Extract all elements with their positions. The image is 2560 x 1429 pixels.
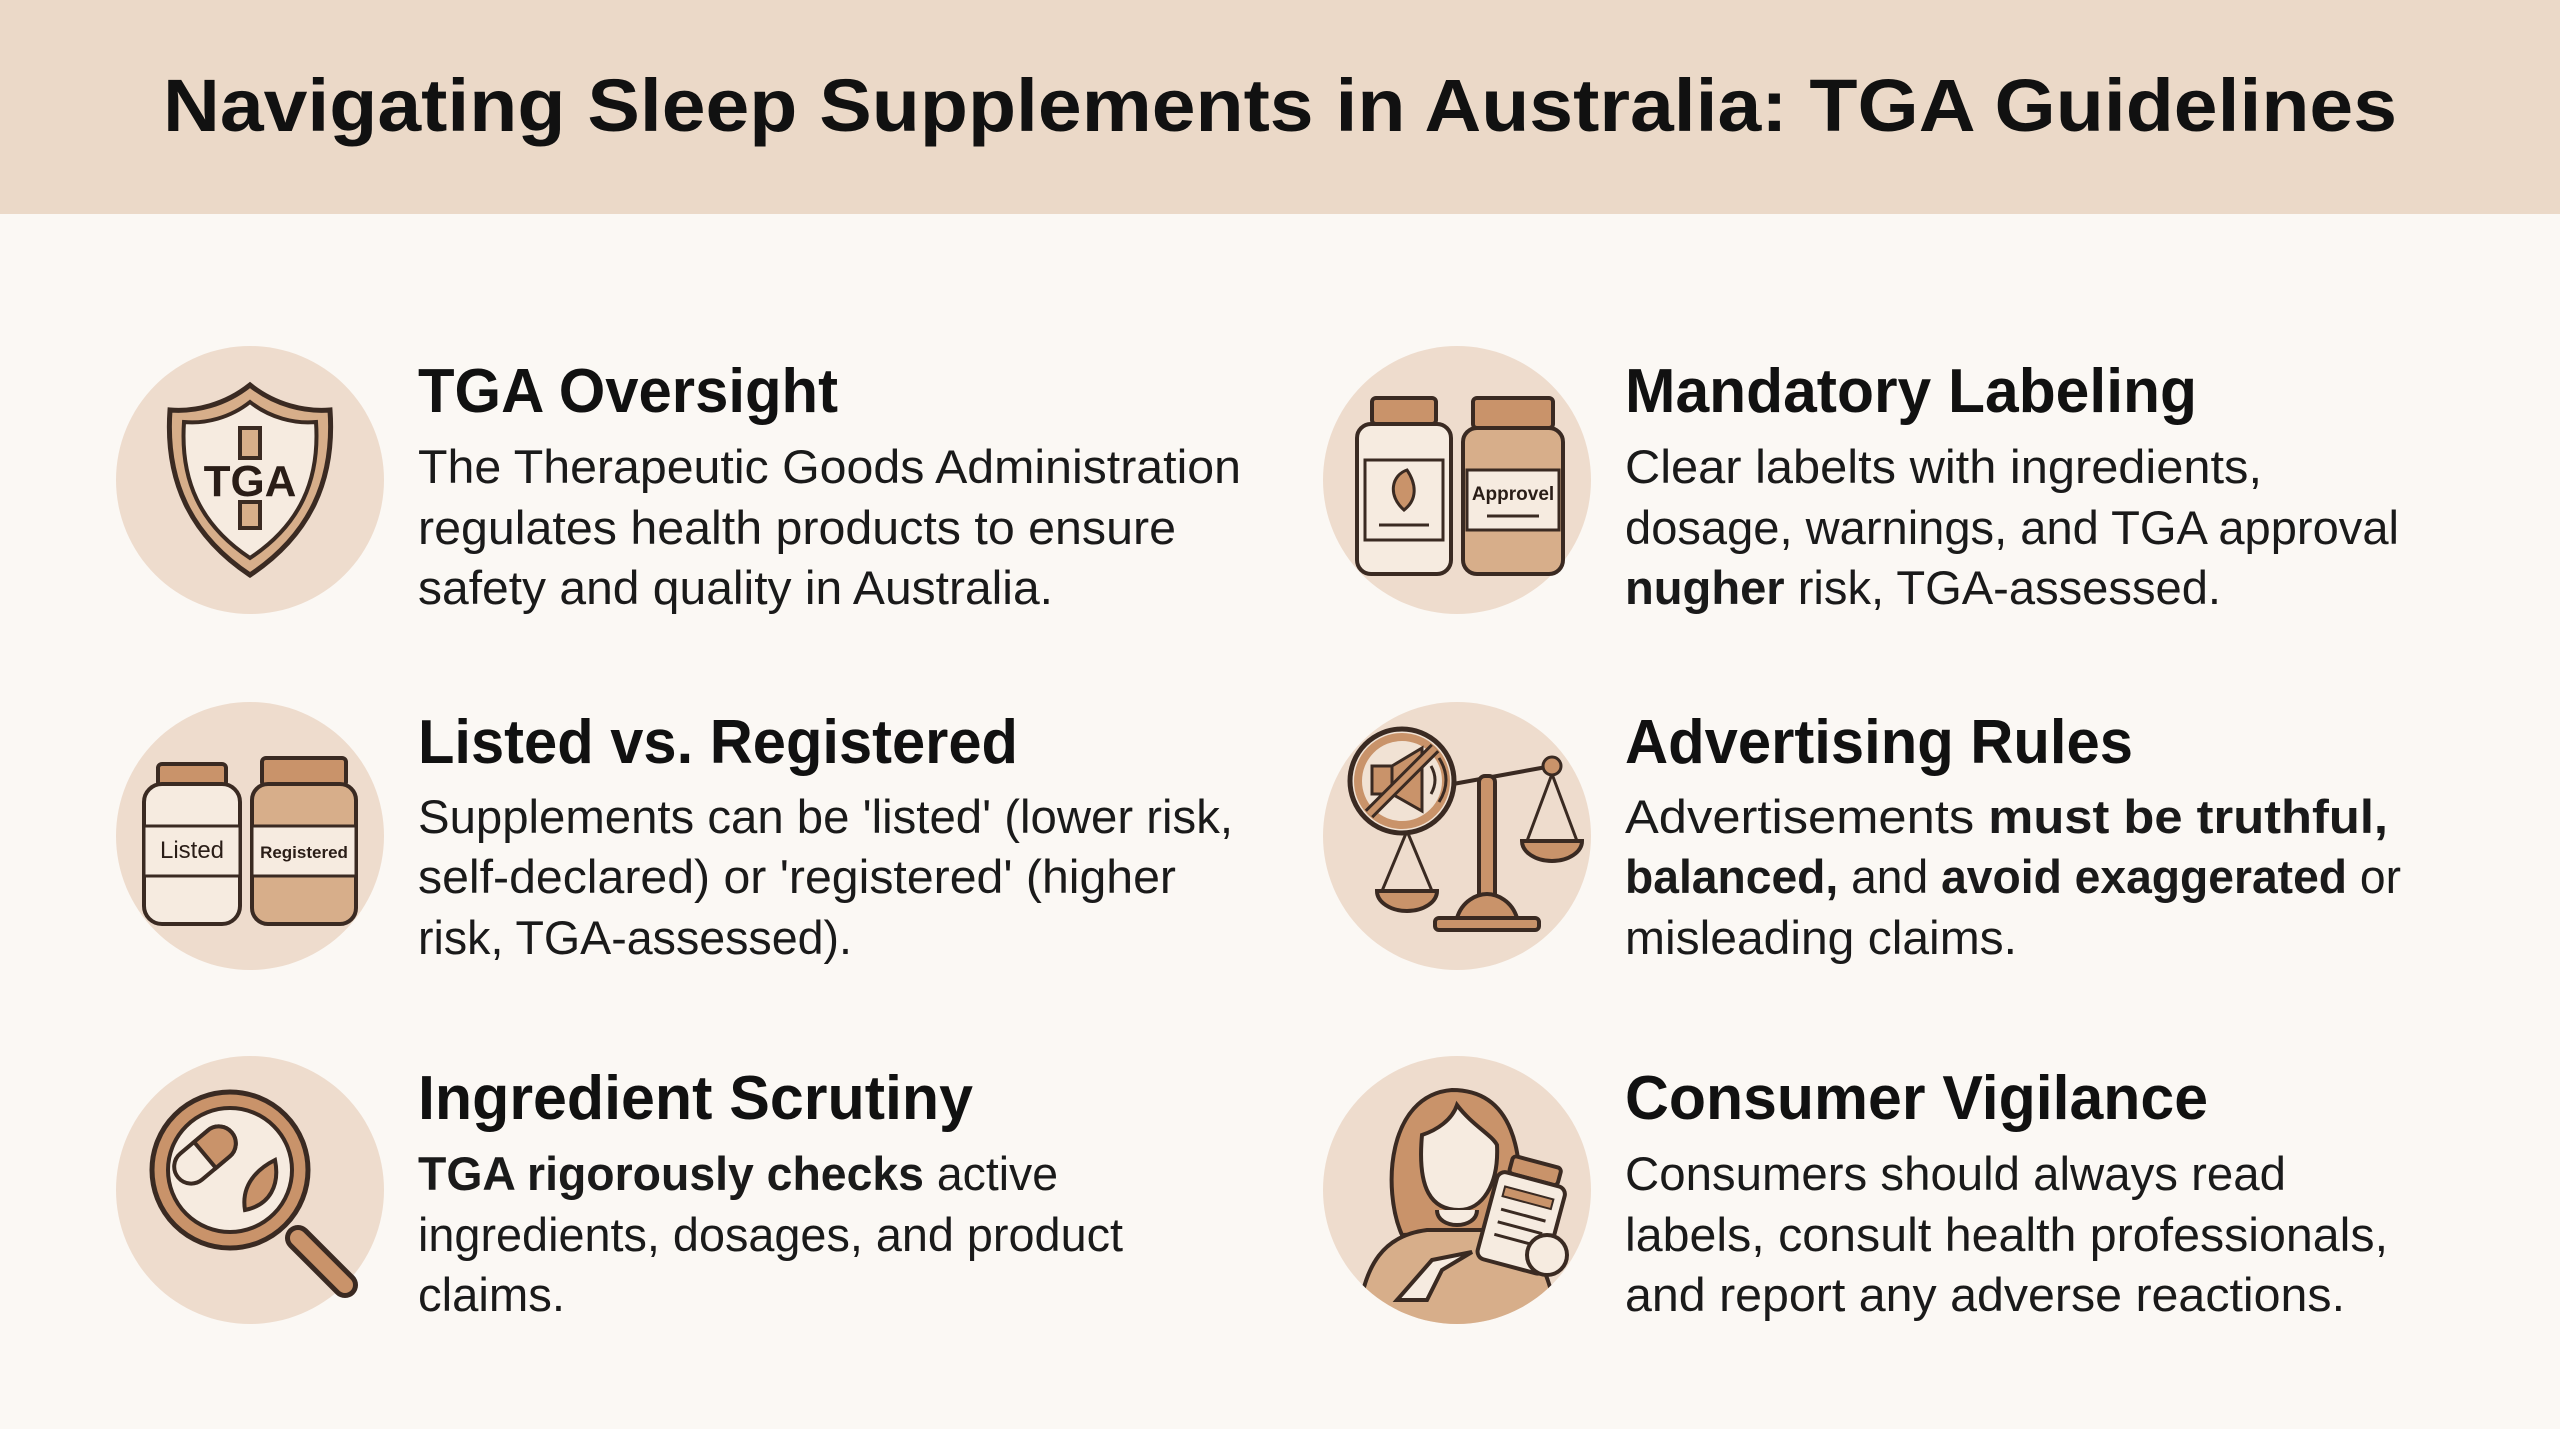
- icon: labelled jars: [1323, 346, 1591, 614]
- heading: Ingredient Scrutiny: [418, 1064, 974, 1133]
- text block: regulates health products to ensure: [418, 501, 1176, 554]
- text block: dosage, warnings, and TGA approval: [1625, 501, 2399, 554]
- text block: The Therapeutic Goods Administration: [418, 440, 1241, 493]
- text block: [1625, 440, 2399, 614]
- heading: TGA Oversight: [418, 357, 838, 426]
- header band: [0, 0, 2560, 214]
- heading: Mandatory Labeling: [1625, 357, 2197, 426]
- icon: shield: [116, 346, 384, 614]
- panel: Advertising Rules: [1323, 702, 2401, 970]
- panel: TGA Oversight: [116, 346, 1241, 614]
- text block: [418, 1147, 1123, 1321]
- text block: TGA rigorously checks active: [418, 1147, 1058, 1200]
- panel: Ingredient Scrutiny: [116, 1056, 1123, 1324]
- title: Navigating Sleep Supplements in Australia: TGA Guidelines: [163, 64, 2397, 147]
- text block: [1625, 1147, 2388, 1321]
- text block: Supplements can be 'listed' (lower risk,: [418, 790, 1233, 843]
- text block: balanced, and avoid exaggerated or: [1625, 850, 2401, 903]
- text block: ingredients, dosages, and product: [418, 1208, 1123, 1261]
- text block: misleading claims.: [1625, 911, 2017, 964]
- text block: self-declared) or 'registered' (higher: [418, 850, 1176, 903]
- icon: bottles: Registered: [260, 843, 348, 862]
- panel: Mandatory Labeling: [1323, 346, 2399, 614]
- icon: no-megaphone and scale: [1323, 702, 1591, 970]
- icon: labelled jars: Approvel: [1472, 484, 1554, 505]
- icon: bottles: [116, 702, 384, 970]
- text block: nugher risk, TGA-assessed.: [1625, 561, 2221, 614]
- text block: [1625, 790, 2401, 964]
- panel: Listed vs Registered: [116, 702, 1233, 970]
- icon: bottles: Listed: [160, 837, 224, 864]
- text block: claims.: [418, 1268, 565, 1321]
- heading: Consumer Vigilance: [1625, 1064, 2208, 1133]
- panel: Consumer Vigilance: [1323, 1056, 2388, 1330]
- text block: labels, consult health professionals,: [1625, 1208, 2388, 1261]
- icon: magnifier: [116, 1056, 384, 1324]
- text block: [418, 440, 1241, 614]
- heading: Advertising Rules: [1625, 708, 2133, 777]
- text block: Clear labelts with ingredients,: [1625, 440, 2262, 493]
- heading: Listed vs. Registered: [418, 708, 1018, 777]
- text block: and report any adverse reactions.: [1625, 1268, 2345, 1321]
- text block: safety and quality in Australia.: [418, 561, 1053, 614]
- text block: [418, 790, 1233, 964]
- icon: shield: TGA: [204, 457, 296, 506]
- icon: person with bottle: [1323, 1056, 1591, 1330]
- text block: Consumers should always read: [1625, 1147, 2286, 1200]
- text block: Advertisements must be truthful,: [1625, 790, 2388, 843]
- text block: risk, TGA-assessed).: [418, 911, 852, 964]
